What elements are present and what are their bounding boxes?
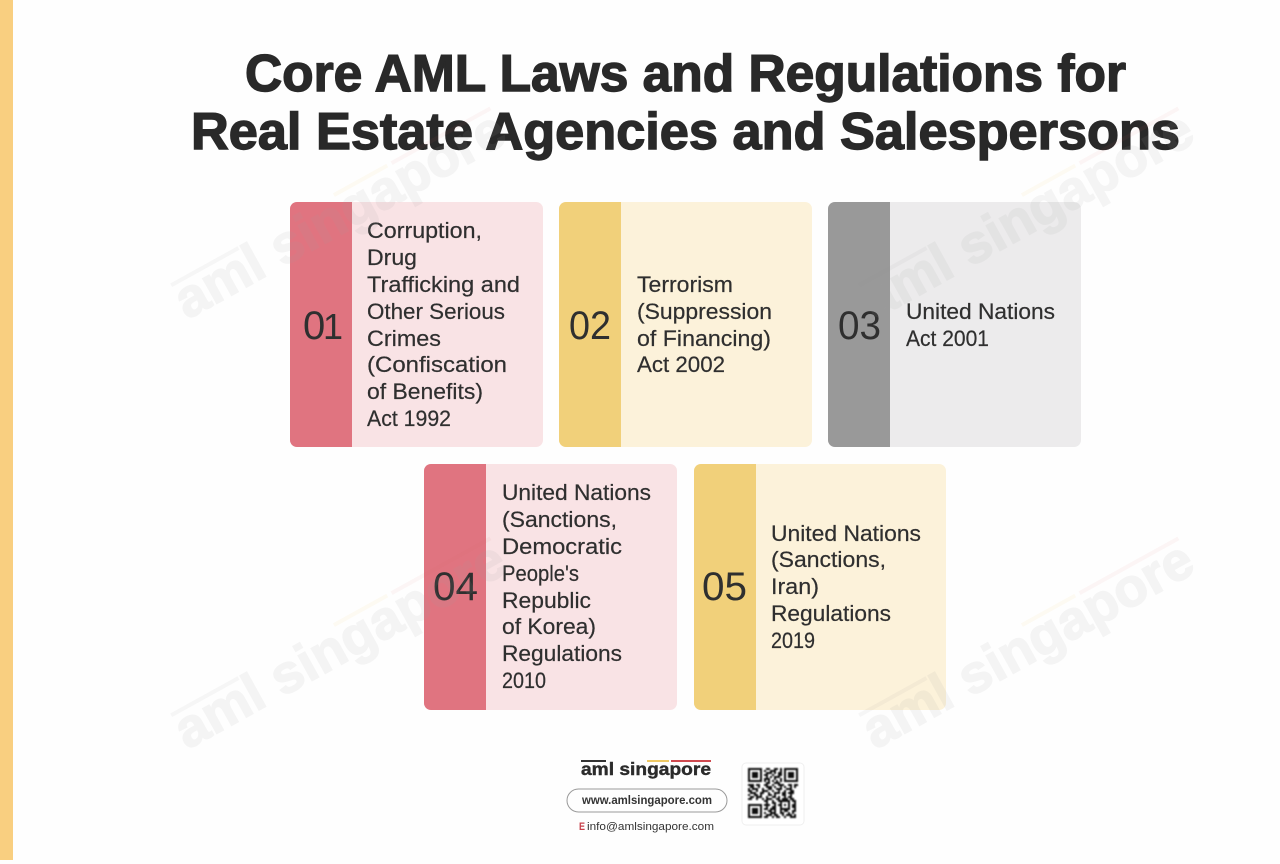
watermark: bottom right: aml singapore bbox=[852, 529, 1204, 760]
card 02: 02 bbox=[569, 304, 611, 348]
card 05: 2019 bbox=[771, 628, 815, 653]
card 01: 0 bbox=[303, 304, 325, 348]
left accent bar bbox=[0, 0, 13, 860]
card 04: Republic bbox=[502, 588, 591, 613]
card 05: 05 bbox=[702, 565, 747, 609]
card 02: (Suppression bbox=[637, 299, 772, 324]
card 04: Democratic bbox=[502, 534, 622, 559]
card 01: Drug bbox=[367, 245, 417, 270]
card 01: Act 1992 bbox=[367, 406, 451, 431]
footer logo: aml singapore bbox=[581, 759, 711, 779]
title: Real Estate Agencies and Salespersons bbox=[191, 103, 1180, 161]
card 02: Terrorism bbox=[637, 272, 733, 297]
card 05: United Nations bbox=[771, 521, 921, 546]
email line: info@amlsingapore.com bbox=[587, 821, 714, 833]
card 03: United Nations bbox=[906, 299, 1055, 324]
card 03 bbox=[828, 202, 1081, 447]
card 04: of Korea) bbox=[502, 614, 596, 639]
card 01: Trafficking and bbox=[367, 272, 520, 297]
card 04: United Nations bbox=[502, 480, 651, 505]
card 01: (Confiscation bbox=[367, 352, 507, 377]
website pill bbox=[567, 789, 727, 812]
card 05: Regulations bbox=[771, 601, 891, 626]
card 02 bbox=[559, 202, 812, 447]
card 01 bbox=[290, 202, 543, 447]
card 01: of Benefits) bbox=[367, 379, 483, 404]
card 01: Crimes bbox=[367, 326, 441, 351]
watermark: bottom left: aml singapore bbox=[164, 529, 516, 760]
title bbox=[191, 45, 1180, 161]
card 01: Corruption, bbox=[367, 218, 482, 243]
card 04: 2010 bbox=[502, 668, 546, 693]
watermark: top left: aml singapore bbox=[164, 99, 516, 330]
card 04: (Sanctions, bbox=[502, 507, 617, 532]
card 04: People's bbox=[502, 561, 579, 586]
card 04 bbox=[424, 464, 677, 710]
website pill: www.amlsingapore.com bbox=[581, 795, 712, 807]
title: Core AML Laws and Regulations for bbox=[245, 45, 1126, 103]
watermark: top right: aml singapore bbox=[852, 99, 1204, 330]
card 04: Regulations bbox=[502, 641, 622, 666]
card 02: Act 2002 bbox=[637, 352, 725, 377]
card 02: of Financing) bbox=[637, 326, 771, 351]
card 01: 1 bbox=[323, 306, 343, 347]
email line: E bbox=[579, 821, 585, 833]
card 05: (Sanctions, bbox=[771, 547, 886, 572]
card 03: Act 2001 bbox=[906, 326, 989, 351]
card 01: Other Serious bbox=[367, 299, 505, 324]
card 04: 04 bbox=[433, 565, 478, 609]
card 05 bbox=[694, 464, 946, 710]
QR code bbox=[742, 763, 804, 825]
card 03: 03 bbox=[838, 304, 881, 348]
card 05: Iran) bbox=[771, 574, 819, 599]
